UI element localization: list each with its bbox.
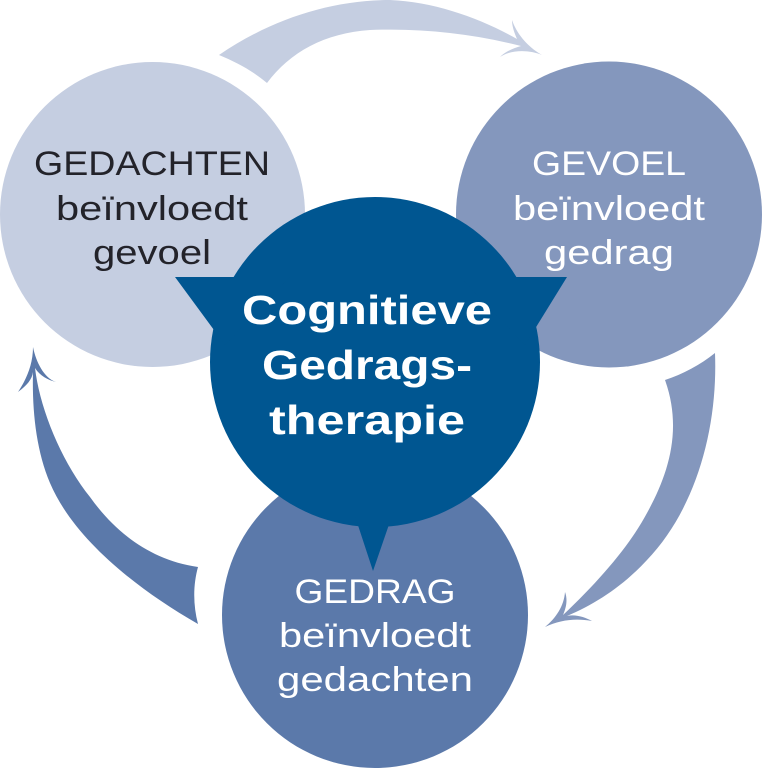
text: gevoel: GEVOEL bbox=[532, 145, 686, 183]
circle: gedachten bbox=[0, 62, 305, 367]
text: gedrag: gedachten bbox=[277, 661, 473, 699]
center speech circle bbox=[175, 197, 567, 571]
arrow: gevoel to gedrag bbox=[545, 353, 715, 627]
arrow: gedrag to gedachten bbox=[18, 347, 198, 624]
text: gedachten: beïnvloedt bbox=[56, 190, 249, 228]
arrow: gedachten to gevoel bbox=[219, 0, 542, 83]
circle: gedrag bbox=[222, 462, 528, 768]
circle: gevoel bbox=[456, 62, 762, 368]
text: gedachten: gevoel bbox=[93, 234, 211, 272]
title: Cognitieve bbox=[242, 287, 492, 333]
text: gedachten: GEDACHTEN bbox=[34, 145, 270, 183]
text: gevoel: beïnvloedt bbox=[513, 190, 706, 228]
text: gedrag: beïnvloedt bbox=[279, 617, 472, 655]
text: gedrag: GEDRAG bbox=[294, 573, 456, 611]
title: therapie bbox=[269, 397, 465, 443]
text: gevoel: gedrag bbox=[544, 234, 674, 272]
title: Gedrags- bbox=[262, 342, 472, 388]
